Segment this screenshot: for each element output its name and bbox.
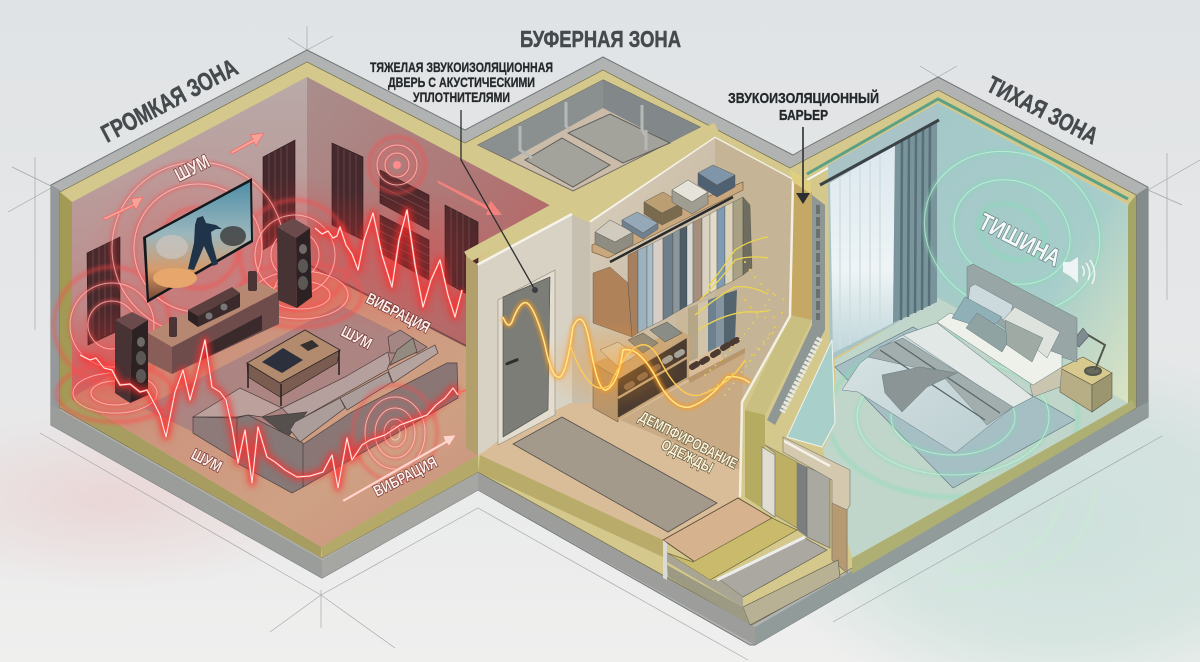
- icon: speaker quiet: [1063, 257, 1095, 284]
- closet floor: [480, 340, 742, 540]
- hanging clothes: [593, 197, 752, 337]
- rug: loud zone: [143, 305, 425, 452]
- brackets: [520, 102, 646, 158]
- bed: [842, 264, 1077, 453]
- isolated floor plates: [525, 114, 670, 187]
- coffee table: [247, 330, 340, 406]
- door: [498, 270, 555, 445]
- zone labels: ТИШИНА: [974, 208, 1065, 272]
- sound ripples on walls and floor: [54, 137, 425, 422]
- headboard: [967, 264, 1077, 362]
- zone labels: ШУМ: [188, 446, 224, 476]
- waveform glow: [540, 320, 680, 410]
- wall: loud zone left wall: [72, 77, 307, 400]
- barrier top slab: [790, 180, 812, 320]
- closet back wall: [590, 138, 715, 420]
- callout: heavy door: УПЛОТНИТЕЛЯМИ: [413, 89, 510, 105]
- technical void: [478, 80, 700, 191]
- zone labels: ВИБРАЦИЯ: [371, 454, 440, 501]
- wall and floor ripples: [829, 149, 1102, 500]
- sheer curtain: [830, 145, 895, 353]
- floor: bedroom: [823, 298, 1128, 558]
- arrow: noise top left: [103, 197, 143, 220]
- arrow: vibration floor: [342, 435, 456, 502]
- zone labels: ШУМ: [172, 151, 213, 186]
- closet right wall: [715, 138, 793, 497]
- floor: loud zone: [73, 262, 478, 547]
- zone labels: [172, 151, 1065, 501]
- panel: quiet zone bedroom: [820, 103, 1128, 590]
- duvet: [842, 323, 1033, 453]
- TV screen: [143, 178, 253, 303]
- zone labels: ОДЕЖДЫ: [658, 436, 716, 477]
- arrow: barrier: [796, 127, 810, 204]
- nightstand: [1060, 357, 1112, 412]
- teal return wall: [787, 340, 835, 447]
- pillows: [968, 284, 1013, 322]
- duvet fold: [903, 323, 1033, 408]
- arrow: noise top middle: [230, 133, 264, 154]
- zone labels: ШУМ: [338, 323, 374, 353]
- callout: heavy door: ТЯЖЕЛАЯ ЗВУКОИЗОЛЯЦИОННАЯ: [370, 59, 553, 75]
- noise waveform upper: [315, 210, 462, 317]
- arrow: noise right wall: [437, 180, 502, 215]
- zone labels: ДЕМПФИРОВАНИЕ: [636, 408, 740, 473]
- zone labels: ВИБРАЦИЯ: [363, 290, 432, 337]
- outside ripples: [940, 487, 1095, 590]
- panel: buffer zone closet: [466, 128, 793, 540]
- floor mat: [513, 417, 717, 532]
- throw: [868, 338, 1013, 425]
- heading: loud zone: ГРОМКАЯ ЗОНА: [97, 54, 242, 148]
- door wall: [478, 215, 572, 455]
- callout: barrier: ЗВУКОИЗОЛЯЦИОННЫЙ: [728, 89, 879, 107]
- clothes rail: [610, 197, 733, 262]
- dampened waves: [503, 237, 785, 407]
- sheet: [937, 313, 1062, 385]
- callout: heavy door: [370, 59, 553, 105]
- panel: barrier section: [663, 170, 850, 625]
- callout: heavy door: ДВЕРЬ С АКУСТИЧЕСКИМИ: [388, 74, 535, 90]
- arrow: noise to door: [458, 375, 497, 393]
- wall: window wall: [828, 103, 938, 360]
- acoustic panels: [87, 140, 478, 345]
- panel: buffer zone top view: [478, 80, 700, 191]
- heading: buffer zone: БУФЕРНАЯ ЗОНА: [520, 26, 681, 52]
- shoe rack: [593, 290, 745, 422]
- noise waveform lower: [80, 340, 458, 488]
- sofa sound ripple: [353, 385, 437, 481]
- curtain rod: [820, 120, 939, 185]
- center speaker: [169, 271, 257, 337]
- heading: quiet zone: ТИХАЯ ЗОНА: [982, 71, 1102, 150]
- leader line: door: [461, 110, 538, 293]
- lamp: [1072, 328, 1105, 375]
- tower speaker right: [277, 218, 312, 308]
- panel: loud zone room: [25, 77, 555, 547]
- stone strip: [767, 195, 825, 425]
- draped throw: [882, 367, 957, 412]
- folded clothes: [595, 165, 735, 254]
- bed base: [1030, 367, 1062, 397]
- shelf: [592, 182, 743, 258]
- blackout curtain: [893, 120, 937, 323]
- wall: bed wall: [938, 103, 1128, 403]
- wood floor section: [663, 498, 772, 562]
- callout: barrier: БАРЬЕР: [779, 107, 828, 124]
- concrete steps: [720, 537, 827, 597]
- tower speaker left: [115, 312, 148, 403]
- sofa: [193, 330, 458, 493]
- wall: loud zone right wall: [307, 77, 555, 352]
- callout: barrier: [728, 89, 879, 124]
- media cabinet: [148, 280, 279, 374]
- cut layers: [762, 447, 775, 517]
- bedroom rug: [835, 327, 1075, 488]
- red glow wash: [72, 184, 480, 420]
- insulation band: [60, 62, 1136, 625]
